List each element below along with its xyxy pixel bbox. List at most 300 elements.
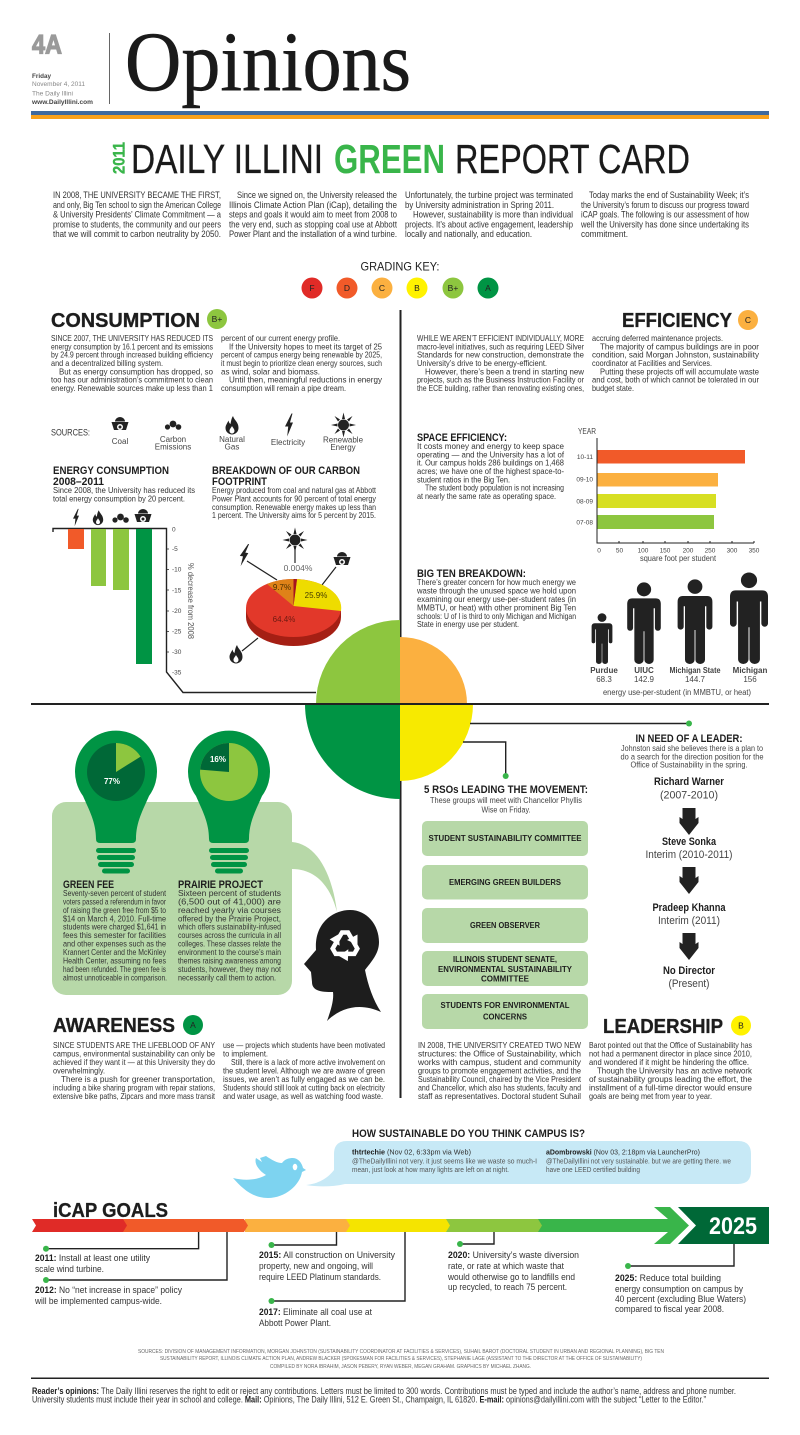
main title: REPORT CARD bbox=[455, 136, 690, 182]
big ten text: examining our energy use-per-student rates (in bbox=[417, 594, 576, 604]
carbon footprint heading and copy bbox=[212, 465, 377, 520]
leadership body text: Though the University has an active network bbox=[597, 1066, 753, 1076]
intro text: & University Presidents’ Climate Commitment — a bbox=[53, 210, 222, 220]
efficiency body text bbox=[417, 333, 760, 393]
intro text: locally and nationally, and education. bbox=[405, 229, 532, 239]
tweet bubble bbox=[306, 1141, 751, 1186]
grading key: D bbox=[344, 283, 350, 293]
awareness body text: Still, there is a lack of more active involvement on bbox=[231, 1057, 385, 1067]
goal 2017 bbox=[259, 1306, 372, 1328]
main title: 2011 bbox=[110, 142, 128, 174]
prairie project text: environment to the course’s main bbox=[178, 947, 281, 957]
pictogram: energy per student bbox=[590, 572, 768, 697]
consumption body text: by 24.9 percent through increased building efficiency bbox=[51, 350, 214, 360]
green fee text: Health Center, assuming no fees bbox=[63, 955, 166, 965]
space efficiency text: acres; we have one of the highest space-to- bbox=[417, 466, 564, 476]
RSO heading: 5 RSOs LEADING THE MOVEMENT: bbox=[424, 784, 588, 796]
icon: coal bbox=[112, 417, 128, 446]
main title: DAILY ILLINI bbox=[131, 136, 323, 182]
pictogram: energy per student: Purdue bbox=[590, 666, 618, 675]
pie chart: carbon footprint: 64.4% bbox=[273, 615, 295, 624]
leadership body text: of sustainability groups leading the effort, the bbox=[589, 1074, 752, 1084]
goal 2020: 2020: University’s waste diversion bbox=[448, 1249, 579, 1260]
grade badge B+ bbox=[207, 309, 227, 329]
dateline: The Daily Illini bbox=[32, 90, 73, 98]
carbon footprint heading and copy: consumption. Renewable energy makes up less than bbox=[212, 502, 376, 512]
leader timeline: Pradeep Khanna bbox=[652, 902, 726, 914]
prairie project text: PRAIRIE PROJECT bbox=[178, 879, 263, 891]
goal 2011: scale wind turbine. bbox=[35, 1263, 104, 1274]
leadership body text bbox=[417, 1040, 753, 1101]
sources legend: SOURCES: bbox=[51, 428, 90, 438]
big ten text: MMBTU, or heat) with other prominent Big Ten bbox=[417, 602, 576, 612]
leadership body text: IN 2008, THE UNIVERSITY CREATED TWO NEW bbox=[418, 1040, 582, 1050]
RSO box 5 bbox=[422, 994, 588, 1029]
big ten text: BIG TEN BREAKDOWN: bbox=[417, 568, 526, 580]
sources credits: SOURCES: DIVISION OF MANAGEMENT INFORMATION, MORGAN JOHNSTON (SUSTAINABILITY COORDINATOR AT FACILITIES & SERVICES), SUHAIL BAROT (DOCTORAL STUDENT IN URBAN AND REGIONAL PLANNING), BIG TEN bbox=[138, 1349, 664, 1355]
bulb chart: green fee 77% bbox=[75, 731, 157, 874]
panel: awareness infographic bbox=[52, 731, 386, 1101]
goal 2020: up recycled, to reach 75 percent. bbox=[448, 1281, 567, 1292]
icon: head with recycling symbol bbox=[304, 910, 381, 1021]
green fee text: of raising the green free from $5 to bbox=[63, 905, 166, 915]
icon: electricity: Electricity bbox=[271, 438, 305, 447]
green fee text: Seventy-seven percent of student bbox=[63, 888, 166, 898]
efficiency body text: WHILE WE AREN’T EFFICIENT INDIVIDUALLY, MORE bbox=[417, 333, 584, 343]
goal 2025: 2025: Reduce total building bbox=[615, 1272, 721, 1283]
RSO box 2 bbox=[422, 865, 588, 900]
efficiency body text: projects, such as the Business Instruction Facility or bbox=[417, 375, 584, 385]
intro text: IN 2008, THE UNIVERSITY BECAME THE FIRST, bbox=[53, 190, 221, 200]
intro text: steps and goals it would aim to meet from 2008 to bbox=[229, 210, 397, 220]
leader timeline: Richard Warner bbox=[654, 776, 725, 788]
leader timeline: (Present) bbox=[668, 978, 710, 990]
bar chart: space per student: 300 bbox=[727, 548, 738, 554]
pie chart: carbon footprint: 9.7% bbox=[273, 583, 291, 592]
goal 2020: would otherwise go to landfills end bbox=[447, 1271, 575, 1282]
efficiency body text: accruing deferred maintenance projects. bbox=[592, 333, 723, 343]
space efficiency text: SPACE EFFICIENCY: bbox=[417, 432, 507, 444]
icon: renewable energy: Renewable bbox=[323, 436, 364, 444]
consumption body text: as wind, solar and biomass. bbox=[221, 366, 320, 376]
big ten text: State in energy use per student. bbox=[417, 619, 519, 629]
intro text: the University’s forum to discuss our progress toward bbox=[581, 200, 749, 210]
icon: natural gas: Natural bbox=[219, 435, 245, 444]
consumption body text: and a decentralized billing system. bbox=[51, 358, 163, 368]
arrow bbox=[680, 808, 698, 835]
leader timeline: Steve Sonka bbox=[662, 836, 717, 848]
pie chart: carbon footprint: 25.9% bbox=[305, 591, 327, 600]
bar chart: space per student: 10-11 bbox=[577, 454, 593, 461]
consumption body text: percent of campus energy being renewable by 2025, bbox=[221, 350, 382, 360]
panel: consumption bbox=[51, 309, 383, 692]
heading: awareness: AWARENESS bbox=[53, 1014, 175, 1037]
grade badge B+: B+ bbox=[212, 314, 222, 324]
tweet 1: mean, just look at how many lights are left on at night. bbox=[352, 1167, 509, 1174]
prairie project text: (6,500 out of 41,000) are bbox=[178, 896, 281, 906]
page number: 4A bbox=[32, 30, 62, 60]
RSO box 5: STUDENTS FOR ENVIRONMENTAL bbox=[440, 1000, 570, 1010]
green fee text: Krannert Center and the McKinley bbox=[63, 947, 167, 957]
grading key: B bbox=[414, 283, 420, 293]
carbon footprint heading and copy: Energy produced from coal and natural gas at Abbott bbox=[212, 485, 376, 495]
leadership body text: staff as representatives. Doctoral student Suhail bbox=[418, 1091, 581, 1101]
iCAP goals timeline bbox=[32, 1200, 769, 1328]
tweet 1: thtrtechie (Nov 02, 6:33pm via Web) bbox=[352, 1148, 471, 1156]
awareness body text: SINCE STUDENTS ARE THE LIFEBLOOD OF ANY bbox=[53, 1040, 215, 1050]
awareness body text: Students should still look at cutting back on electricity bbox=[223, 1082, 386, 1092]
reader's opinions note: University students must include their year in school and college. Mail: Opinions, The Daily Illini, 512 E. Green St., Champaign, IL 61820. E-mail: opinions@dailyillini.com with the subject “Letter to the Editor.” bbox=[32, 1394, 706, 1404]
twitter callout bbox=[233, 1128, 751, 1198]
goal 2017: Abbott Power Plant. bbox=[259, 1317, 331, 1328]
goal 2020: rate, or rate at which waste that bbox=[448, 1260, 564, 1271]
space efficiency text: operating — and the University has a lot of bbox=[417, 449, 565, 459]
grading key: GRADING KEY: bbox=[360, 260, 440, 274]
RSO box 4 bbox=[422, 951, 588, 986]
heading: iCAP goals: iCAP GOALS bbox=[53, 1200, 168, 1222]
goal 2025: compared to fiscal year 2008. bbox=[615, 1303, 724, 1314]
tweet 2: aDombrowski (Nov 03, 2:18pm via LauncherPro) bbox=[546, 1148, 700, 1156]
dateline: November 4, 2011 bbox=[32, 81, 85, 88]
bar chart: space per student: 0 bbox=[597, 548, 601, 554]
icon: twitter bird bbox=[233, 1156, 306, 1198]
bar chart: energy consumption change: -30 bbox=[172, 649, 182, 656]
intro text: commitment. bbox=[581, 229, 628, 239]
bar chart: space per student: 08-09 bbox=[576, 498, 593, 506]
intro text bbox=[53, 190, 749, 239]
tweet 1: @TheDailyIllini not very. it just seems like we waste so much-I bbox=[352, 1158, 537, 1166]
big ten text: There’s greater concern for how much energy we bbox=[417, 577, 576, 587]
pictogram: energy per student: 68.3 bbox=[596, 675, 612, 684]
efficiency body text: Putting these projects off will accumulate waste bbox=[600, 366, 759, 376]
RSO heading: Wise on Friday. bbox=[482, 806, 530, 814]
connector lines bbox=[463, 720, 692, 779]
bar chart: energy consumption change: -5 bbox=[172, 546, 178, 553]
quadrant circle: efficiency bbox=[400, 637, 467, 704]
intro text: that we will commit to carbon neutrality by 2050. bbox=[53, 229, 221, 239]
efficiency body text: and cost, both of which cannot be tolerated in our bbox=[592, 375, 759, 385]
space efficiency text: It costs money and energy to keep space bbox=[417, 441, 564, 451]
big ten text: waste through the unused space we hold upon bbox=[416, 586, 576, 596]
space efficiency text: at nearly the same rate as operating space. bbox=[417, 491, 556, 501]
timeline arrow band bbox=[32, 1207, 769, 1244]
awareness body text: issues, we aren’t as fully engaged as we can be. bbox=[223, 1074, 385, 1084]
quadrant circle: leadership bbox=[400, 704, 473, 781]
panel: leadership bbox=[417, 720, 764, 1101]
bar chart: energy consumption change: -20 bbox=[172, 608, 182, 615]
tweet 2: @TheDailyIllini not very sustainable. but we are getting there. we bbox=[546, 1158, 731, 1166]
consumption body text: percent of our current energy profile. bbox=[221, 333, 340, 343]
energy consumption heading and copy: total energy consumption by 20 percent. bbox=[53, 494, 185, 504]
consumption body text: energy. Renewable sources make up less than 1 bbox=[51, 383, 213, 393]
leader timeline: No Director bbox=[663, 965, 716, 977]
prairie project text: which offers sustainability-infused bbox=[177, 922, 281, 932]
intro text: projects. It’s about active engagement, leadership bbox=[405, 219, 573, 229]
grading key: C bbox=[379, 283, 385, 293]
bar chart: space per student: 150 bbox=[660, 548, 671, 554]
goal 2025 bbox=[615, 1272, 746, 1314]
awareness body text: overwhelmingly. bbox=[53, 1066, 105, 1076]
bar chart: space per student: 350 bbox=[749, 548, 760, 554]
energy consumption heading and copy bbox=[53, 465, 195, 504]
bar chart: space per student bbox=[576, 427, 760, 563]
pictogram: energy per student: 144.7 bbox=[685, 675, 706, 684]
green fee text: students were charged $1,641 in bbox=[63, 922, 166, 932]
arrow bbox=[680, 933, 698, 960]
green fee text: GREEN FEE bbox=[63, 879, 114, 891]
leadership body text: Sustainability Council, chaired by the Vice President bbox=[418, 1074, 581, 1084]
reader's opinions note bbox=[32, 1386, 736, 1404]
leader timeline: IN NEED OF A LEADER: bbox=[636, 733, 742, 745]
green fee text: voters passed a referendum in favor bbox=[63, 896, 166, 906]
intro text: Today marks the end of Sustainability Week; it’s bbox=[589, 190, 749, 200]
grading key: A bbox=[485, 283, 491, 293]
bar chart: space per student: 50 bbox=[616, 548, 623, 554]
tweet 2 bbox=[546, 1148, 731, 1174]
goal 2015: property, new and ongoing, will bbox=[259, 1260, 373, 1271]
grade badge B: B bbox=[738, 1020, 744, 1030]
arrow bbox=[680, 867, 698, 894]
goal 2017: 2017: Eliminate all coal use at bbox=[259, 1306, 372, 1317]
prairie project text bbox=[177, 879, 282, 982]
awareness body text bbox=[53, 1040, 386, 1101]
consumption body text: Until then, meaningful reductions in energy bbox=[229, 375, 383, 385]
space efficiency text bbox=[417, 432, 565, 501]
efficiency body text: condition, said Morgan Johnston, sustainability bbox=[592, 350, 760, 360]
intro text: Illinois Climate Action Plan (iCap), detailing the bbox=[229, 200, 397, 210]
poll question: HOW SUSTAINABLE DO YOU THINK CAMPUS IS? bbox=[352, 1128, 585, 1140]
icon: carbon emissions bbox=[155, 421, 191, 452]
quadrant circle: consumption bbox=[316, 620, 400, 704]
goal 2015: require LEED Platinum standards. bbox=[259, 1271, 381, 1282]
bar chart: space per student: YEAR bbox=[578, 427, 596, 436]
consumption body text: consumption will remain a pipe dream. bbox=[221, 383, 346, 393]
RSO box 4: ILLINOIS STUDENT SENATE, bbox=[453, 954, 557, 964]
bulb chart: prairie project 16%: 16% bbox=[210, 755, 226, 764]
grading key bbox=[302, 260, 498, 298]
pictogram: energy per student: 156 bbox=[743, 675, 757, 684]
pictogram: energy per student: Michigan bbox=[733, 666, 767, 675]
goal 2012 bbox=[34, 1284, 182, 1306]
big ten text: schools: U of I is third to only Michigan and Michigan bbox=[417, 611, 576, 621]
leadership body text: groups to promote engagement activities, and the bbox=[418, 1066, 581, 1076]
efficiency body text: Standards for new construction, demonstrate the bbox=[417, 350, 584, 360]
energy consumption heading and copy: ENERGY CONSUMPTION bbox=[53, 465, 169, 477]
bar chart: space per student: 250 bbox=[705, 548, 716, 554]
awareness body text: achieved if they want it — at this University they do bbox=[53, 1057, 215, 1067]
intro text: iCAP goals. The following is our assessment of how bbox=[581, 210, 749, 220]
awareness body text: extensive bike paths, Zipcars and more mass transit bbox=[53, 1091, 216, 1101]
icon: renewable energy: Energy bbox=[330, 443, 356, 452]
consumption body text: it must begin to prioritize clean energy sources, such bbox=[221, 358, 382, 368]
prairie project text: reached yearly via courses bbox=[178, 905, 281, 915]
grading key: F bbox=[309, 283, 315, 293]
awareness body text: the student level. Although we are aware of green bbox=[223, 1066, 385, 1076]
goal connectors bbox=[46, 1232, 734, 1301]
bulb chart: prairie project 16% bbox=[188, 731, 270, 874]
dateline: www.DailyIllini.com bbox=[31, 99, 93, 106]
pie chart: carbon footprint bbox=[230, 528, 350, 664]
big ten text bbox=[416, 568, 576, 629]
green fee text: $14 on March 4, 2010. Full-time bbox=[63, 913, 166, 923]
consumption body text: energy consumption by 16.1 percent and its emissions bbox=[51, 341, 213, 351]
heading: leadership: LEADERSHIP bbox=[603, 1015, 723, 1038]
goal 2011 bbox=[35, 1252, 150, 1274]
consumption body text bbox=[51, 333, 383, 393]
icon: natural gas: Gas bbox=[225, 442, 239, 452]
icon: electricity bbox=[271, 414, 305, 447]
prairie project text: students, however, they may not bbox=[178, 964, 282, 974]
prairie project text: courses across the curricula in all bbox=[178, 930, 281, 940]
bar chart: space per student: 100 bbox=[638, 548, 649, 554]
RSO box 1 bbox=[422, 821, 588, 856]
dateline bbox=[31, 73, 93, 106]
intro text: Since we signed on, the University released the bbox=[237, 190, 397, 200]
intro text: Power Plant and the installation of a wind turbine. bbox=[229, 229, 397, 239]
efficiency body text: The majority of campus buildings are in poor bbox=[600, 341, 759, 351]
sources credits: COMPILED BY NORA IBRAHIM, JASON PEBERY, RYAN WEBER, MEGAN GRAHAM. GRAPHICS BY MICHAEL ZHANG. bbox=[270, 1364, 531, 1370]
pictogram: energy per student: 142.9 bbox=[634, 675, 655, 684]
sources credits: SUSTAINABILITY REPORT, ILLINOIS CLIMATE ACTION PLAN, ANDREW BLACKER (SPOKESMAN FOR FACILITIES & SERVICES), STEPHANIE LAGE (ASSISTANT TO THE DIRECTOR AT THE OFFICE OF SUSTAINABILITY) bbox=[160, 1356, 642, 1362]
efficiency body text: coordinator at Facilities and Services. bbox=[592, 358, 712, 368]
quadrant circle: awareness bbox=[305, 704, 400, 799]
leadership body text: works with campus, student and community bbox=[417, 1057, 582, 1067]
bar chart: space per student: 07-08 bbox=[576, 520, 593, 526]
RSO box 1: STUDENT SUSTAINABILITY COMMITTEE bbox=[428, 833, 582, 843]
leader timeline bbox=[620, 733, 764, 990]
bar chart: space per student: square foot per student bbox=[640, 554, 717, 563]
sources legend bbox=[51, 412, 364, 452]
awareness body text: and water usage, as well as watching food waste. bbox=[223, 1091, 383, 1101]
leader timeline: do a search for the direction position for the bbox=[620, 752, 764, 762]
awareness body text: including a bike sharing program with repair stations, bbox=[53, 1082, 215, 1092]
intro text: well the University has done since undertaking its bbox=[580, 219, 749, 229]
awareness body text: to implement. bbox=[223, 1048, 268, 1058]
icon: coal: Coal bbox=[112, 437, 128, 446]
goal 2015: 2015: All construction on University bbox=[259, 1249, 395, 1260]
consumption body text: If the University hopes to meet its target of 25 bbox=[229, 341, 382, 351]
intro text: by University administration in Spring 2011. bbox=[405, 200, 554, 210]
leadership body text: structures: the Office of Sustainability, which bbox=[418, 1048, 581, 1058]
intro text: the very end, such as stopping coal use at Abbott bbox=[229, 219, 397, 229]
efficiency body text: budget state. bbox=[592, 383, 634, 393]
sources credits bbox=[138, 1349, 664, 1370]
leadership body text: goals are being met from year to year. bbox=[589, 1091, 712, 1101]
efficiency body text: the ECE building, rather than renovating existing ones, bbox=[417, 383, 584, 393]
prairie project text: Sixteen percent of students bbox=[178, 888, 281, 898]
leader timeline: Johnston said she believes there is a plan to bbox=[621, 744, 763, 753]
pictogram: energy per student: UIUC bbox=[634, 666, 654, 675]
bar chart: space per student: 09-10 bbox=[576, 476, 593, 484]
RSO box 2: EMERGING GREEN BUILDERS bbox=[449, 877, 561, 887]
masthead bbox=[31, 15, 769, 119]
icon: carbon emissions: Emissions bbox=[155, 442, 191, 452]
efficiency body text: University’s drive to be energy-efficient. bbox=[417, 358, 547, 368]
grade badge A: A bbox=[190, 1020, 196, 1030]
intro text: Unfortunately, the turbine project was terminated bbox=[405, 190, 573, 200]
bar chart: energy consumption change: -10 bbox=[172, 566, 182, 574]
goal 2012: will be implemented campus-wide. bbox=[34, 1295, 162, 1306]
bulb chart: green fee 77%: 77% bbox=[104, 777, 120, 786]
heading: consumption: CONSUMPTION bbox=[51, 309, 200, 332]
main title: GREEN bbox=[334, 136, 445, 182]
RSO box 3: GREEN OBSERVER bbox=[470, 920, 541, 930]
prairie project text: colleges. These classes relate the bbox=[178, 939, 281, 949]
RSO box 4: COMMITTEE bbox=[481, 974, 529, 984]
masthead colour rule bbox=[31, 111, 769, 119]
RSO box 4: ENVIRONMENTAL SUSTAINABILITY bbox=[438, 964, 572, 974]
leader timeline: Interim (2010-2011) bbox=[646, 849, 732, 861]
green fee text bbox=[63, 879, 167, 982]
awareness body text: campus, environmental sustainability can only be bbox=[53, 1048, 215, 1058]
space efficiency text: student ratios in the Big Ten. bbox=[417, 474, 510, 484]
leadership body text: and wondered if it might be hindering the office. bbox=[589, 1057, 749, 1067]
heading: efficiency: EFFICIENCY bbox=[622, 309, 732, 332]
prairie project text: offered by the Prairie Project, bbox=[178, 913, 281, 923]
goal 2012: 2012: No “net increase in space” policy bbox=[35, 1284, 182, 1295]
goal 2011: 2011: Install at least one utility bbox=[35, 1252, 150, 1263]
green fee text: almost unnoticeable in comparison. bbox=[63, 972, 167, 982]
main title bbox=[110, 136, 690, 182]
green fee text: and other expenses such as the bbox=[63, 939, 166, 949]
goal 2015 bbox=[259, 1249, 395, 1282]
space efficiency text: it. Our campus holds 286 buildings on 1,468 bbox=[417, 458, 564, 468]
dateline: Friday bbox=[32, 73, 51, 80]
section title: Opinions: Opinions bbox=[125, 15, 411, 109]
green fee text: had been refunded. The green fee is bbox=[63, 964, 166, 974]
bar chart: energy consumption change bbox=[53, 509, 316, 692]
carbon footprint heading and copy: 1 percent. The University aims for 5 percent by 2015. bbox=[212, 510, 376, 520]
bar chart: energy consumption change: % decrease from 2008 bbox=[186, 563, 195, 640]
goal 2020 bbox=[447, 1249, 579, 1292]
leader timeline: Office of Sustainability in the spring. bbox=[630, 761, 748, 770]
intro text: However, sustainability is more than individual bbox=[413, 210, 573, 220]
carbon footprint heading and copy: FOOTPRINT bbox=[212, 476, 267, 488]
bar chart: energy consumption change: -25 bbox=[172, 628, 182, 636]
RSO box 5: CONCERNS bbox=[483, 1012, 527, 1022]
goal 2025: energy consumption on campus by bbox=[615, 1283, 743, 1294]
goal 2025: 40 percent (excluding Blue Waters) bbox=[615, 1293, 746, 1304]
grade badge A bbox=[183, 1015, 203, 1035]
energy consumption heading and copy: Since 2008, the University has reduced its bbox=[53, 485, 195, 495]
RSO heading bbox=[424, 784, 588, 814]
speech panel bbox=[52, 802, 337, 995]
tweet 2: have one LEED certified building bbox=[546, 1167, 640, 1174]
icon: renewable energy bbox=[323, 412, 364, 452]
tweet 1 bbox=[352, 1148, 537, 1174]
carbon footprint heading and copy: Power Plant accounts for 90 percent of total energy bbox=[212, 494, 377, 504]
RSO heading: These groups will meet with Chancellor Phyllis bbox=[430, 796, 582, 805]
grade badge C: C bbox=[745, 315, 751, 325]
consumption body text: But as energy consumption has dropped, so bbox=[59, 366, 213, 376]
leadership body text: Barot pointed out that the Office of Sustainability has bbox=[589, 1040, 752, 1050]
intro text: and only, Big Ten school to sign the American College bbox=[53, 200, 221, 210]
efficiency body text: macro-level initiatives, such as requiring LEED Silver bbox=[417, 341, 584, 351]
grade badge C bbox=[738, 310, 758, 330]
space efficiency text: The student body population is not increasing bbox=[425, 483, 564, 493]
pie chart: carbon footprint: 0.004% bbox=[284, 563, 313, 573]
awareness body text: There is a push for greener transportation, bbox=[61, 1074, 215, 1084]
leadership body text: not had a permanent director in place since 2010, bbox=[589, 1048, 752, 1058]
grade badge B bbox=[731, 1016, 751, 1036]
goal dots bbox=[43, 1241, 631, 1304]
pictogram: energy per student: energy use-per-student (in MMBTU, or heat) bbox=[603, 688, 751, 697]
grading key: B+ bbox=[448, 283, 458, 293]
prairie project text: necessarily call them to action. bbox=[178, 972, 276, 982]
green fee text: fees this semester for facilities bbox=[63, 930, 166, 940]
icon: natural gas bbox=[219, 416, 245, 452]
bar chart: space per student: 200 bbox=[683, 548, 694, 554]
